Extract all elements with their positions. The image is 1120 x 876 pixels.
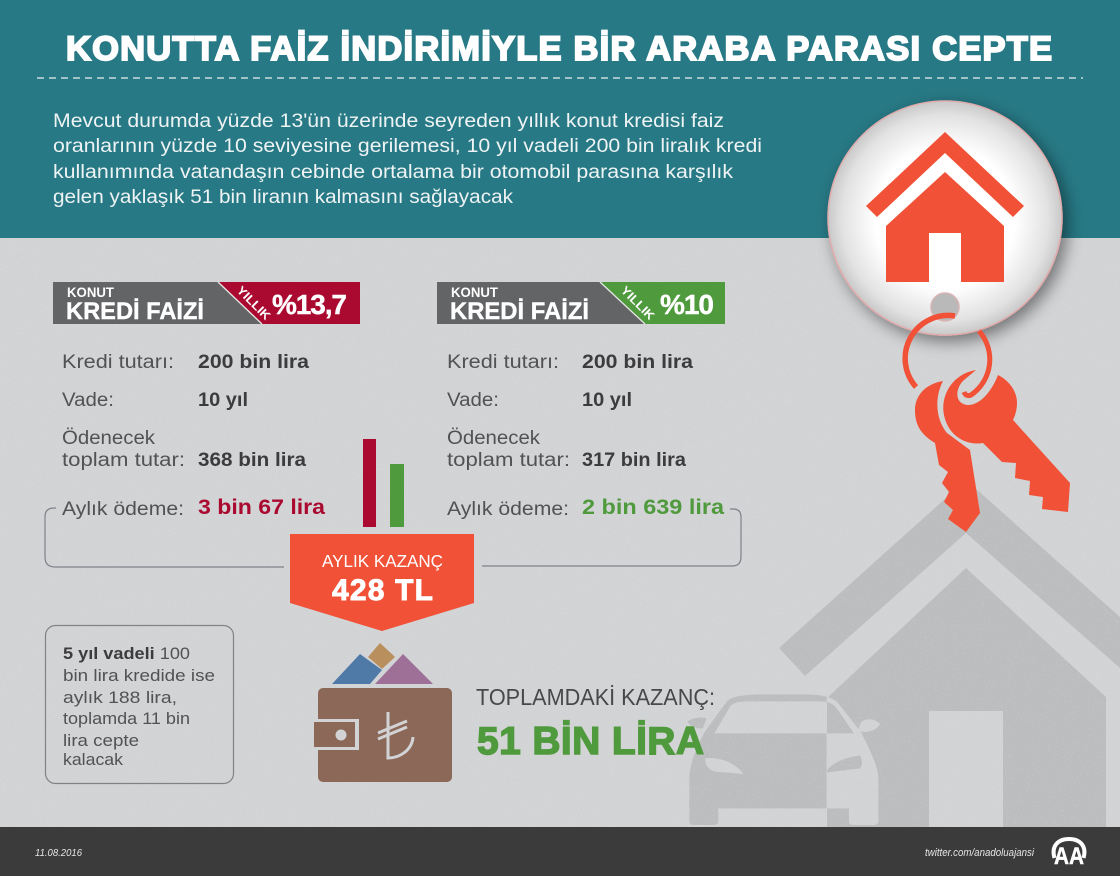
rate tag: KONUT xyxy=(67,285,115,300)
background illustration: house silhouette xyxy=(779,480,1120,827)
intro paragraph: oranlarının yüzde 10 seviyesine gerilemesi, 10 yıl vadeli 200 bin liralık kredi xyxy=(53,136,762,157)
fob hole xyxy=(931,293,959,321)
total gain: 51 BİN LİRA xyxy=(477,720,704,763)
total gain: TOPLAMDAKİ KAZANÇ: xyxy=(476,684,715,710)
callout: monthly gain: AYLIK KAZANÇ xyxy=(322,551,443,571)
loan details: Aylık ödeme: xyxy=(62,499,184,520)
loan details: Kredi tutarı: xyxy=(447,352,559,373)
loan details: Ödenecek xyxy=(62,428,156,449)
loan details: toplam tutar: xyxy=(62,450,185,471)
background speckle texture xyxy=(0,238,1120,828)
grey background xyxy=(0,238,1120,828)
right key xyxy=(943,370,1070,512)
icon: house body xyxy=(886,172,1004,282)
bracket: right xyxy=(482,509,741,566)
bar chart: monthly payment comparison xyxy=(363,439,404,527)
loan details: 200 bin lira xyxy=(198,352,309,373)
note box: 5-year loan xyxy=(46,626,234,784)
icon: house key fob xyxy=(828,101,1062,335)
rate tag: %13,7 xyxy=(272,289,347,320)
icon: keys and ring xyxy=(905,315,1070,532)
rate tag: KREDİ FAİZİ xyxy=(450,298,589,325)
loan details: 10 yıl xyxy=(198,390,248,411)
bracket: left xyxy=(45,508,284,567)
loan details: Vade: xyxy=(447,390,499,411)
icon: Anadolu Agency logo: AA xyxy=(1054,843,1084,870)
intro paragraph: gelen yaklaşık 51 bin liranın kalmasını sağlayacak xyxy=(53,187,514,208)
background illustration: car silhouette xyxy=(687,694,880,825)
note box: 5-year loan: lira cepte xyxy=(63,732,139,750)
rate tag xyxy=(437,282,725,325)
loan details: toplam tutar: xyxy=(447,450,570,471)
loan details: Kredi tutarı: xyxy=(62,352,174,373)
callout: monthly gain xyxy=(290,534,474,631)
note box: 5-year loan: kalacak xyxy=(63,751,124,769)
rate tag: YILLIK xyxy=(234,283,274,323)
loan details: Ödenecek xyxy=(447,428,541,449)
title: KONUTTA FAİZ İNDİRİMİYLE BİR ARABA PARASI CEPTE xyxy=(66,30,1052,68)
left key xyxy=(915,381,980,532)
note box: 5-year loan: toplamda 11 bin xyxy=(63,710,190,728)
loan details: 368 bin lira xyxy=(198,450,306,471)
note box: 5-year loan: 5 yıl vadeli 100 xyxy=(63,645,190,663)
panel: reduced rate xyxy=(437,282,725,520)
panel: current rate xyxy=(53,282,360,520)
icon: house roof xyxy=(866,132,1024,217)
loan details: 200 bin lira xyxy=(582,352,693,373)
rate tag: KONUT xyxy=(451,285,499,300)
rate tag: %10 xyxy=(660,289,714,320)
loan details xyxy=(447,352,724,520)
rate tag xyxy=(53,282,360,325)
loan details xyxy=(62,352,325,520)
loan details: 3 bin 67 lira xyxy=(198,496,325,519)
loan details: 317 bin lira xyxy=(582,450,686,471)
rate tag: YILLIK xyxy=(618,283,658,323)
intro paragraph: kullanımında vatandaşın cebinde ortalama bir otomobil parasına karşılık xyxy=(53,162,734,183)
loan details: 2 bin 639 lira xyxy=(582,496,724,519)
header band xyxy=(0,0,1120,238)
icon: wallet xyxy=(314,643,452,782)
rate tag: KREDİ FAİZİ xyxy=(66,298,204,325)
key ring xyxy=(905,315,990,396)
footer social handle: twitter.com/anadoluajansi xyxy=(925,847,1034,859)
callout: monthly gain: 428 TL xyxy=(332,574,433,607)
footer bar xyxy=(0,827,1120,876)
footer date: 11.08.2016 xyxy=(35,848,82,859)
intro paragraph xyxy=(53,111,762,208)
loan details: 10 yıl xyxy=(582,390,632,411)
total gain xyxy=(476,684,715,763)
intro paragraph: Mevcut durumda yüzde 13'ün üzerinde seyreden yıllık konut kredisi faiz xyxy=(53,111,724,132)
note box: 5-year loan: aylık 188 lira, xyxy=(63,689,177,707)
note box: 5-year loan: bin lira kredide ise xyxy=(63,667,215,685)
loan details: Aylık ödeme: xyxy=(447,499,569,520)
loan details: Vade: xyxy=(62,390,114,411)
